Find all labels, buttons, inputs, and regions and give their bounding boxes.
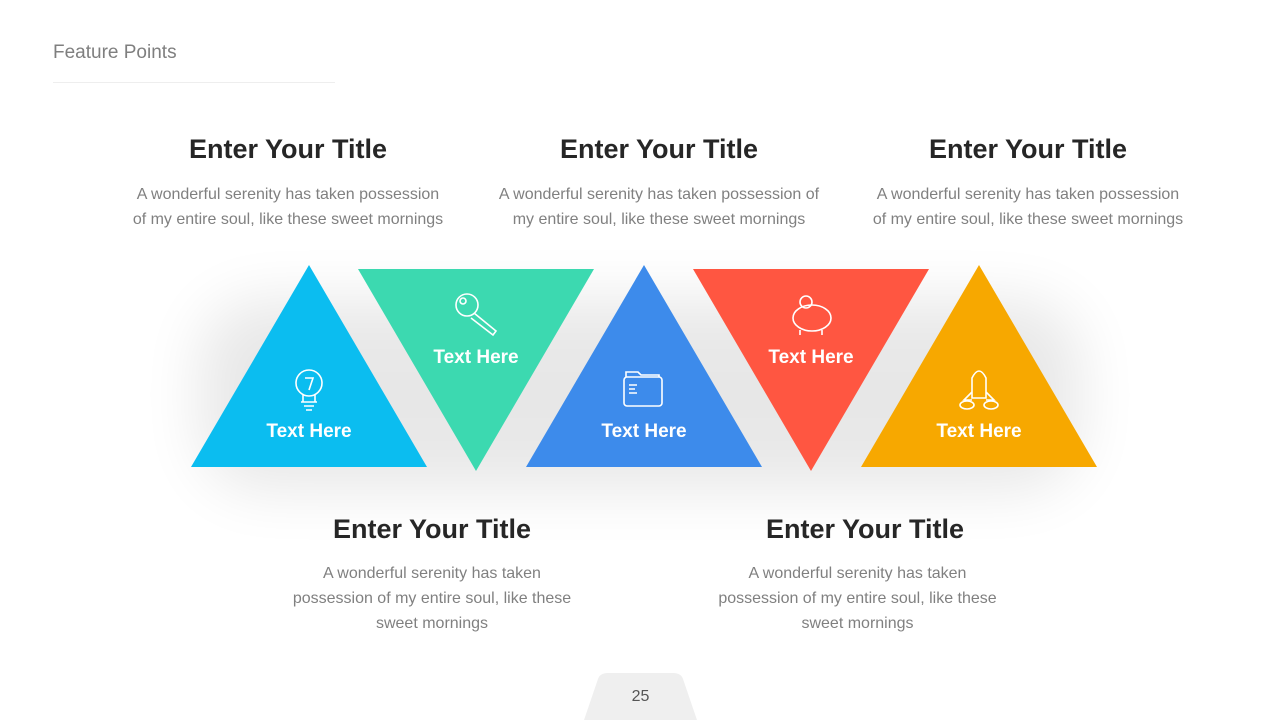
text block: bottom right: sweet mornings xyxy=(801,615,914,632)
triangle 1: light blue xyxy=(191,265,427,467)
triangle 2: green: Text Here xyxy=(433,347,519,368)
icon: key xyxy=(456,294,496,335)
text block: top right: Enter Your Title xyxy=(929,134,1127,164)
text block: bottom right: Enter Your Title xyxy=(766,514,964,544)
text block: top right xyxy=(873,134,1183,228)
text block: top right: of my entire soul, like these sweet mornings xyxy=(873,211,1183,228)
icon: rocket xyxy=(960,371,998,409)
text block: top middle xyxy=(499,134,820,228)
triangle 5: orange: Text Here xyxy=(936,421,1022,442)
text block: top right: A wonderful serenity has taken possession xyxy=(877,186,1179,203)
text block: bottom right xyxy=(718,514,997,632)
text block: bottom left: Enter Your Title xyxy=(333,514,531,544)
text block: top left xyxy=(133,134,443,228)
text block: top left: of my entire soul, like these sweet mornings xyxy=(133,211,443,228)
text block: bottom left: sweet mornings xyxy=(376,615,488,632)
triangle 2: green xyxy=(358,269,594,471)
icon: bulb xyxy=(296,370,322,410)
triangle 1: light blue: Text Here xyxy=(266,421,352,442)
page number tab xyxy=(584,673,697,720)
triangle 3: blue: Text Here xyxy=(601,421,687,442)
page number tab: 25 xyxy=(632,688,649,705)
text block: bottom left: A wonderful serenity has taken xyxy=(323,565,541,582)
text block: bottom right: A wonderful serenity has taken xyxy=(749,565,966,582)
text block: top left: A wonderful serenity has taken possession xyxy=(137,186,439,203)
triangle 4: red xyxy=(693,269,929,471)
text block: bottom left xyxy=(293,514,571,632)
text block: bottom left: possession of my entire soul, like these xyxy=(293,590,571,607)
icon: piggy bank xyxy=(793,296,831,335)
header: Feature Points: Feature Points xyxy=(53,42,177,63)
text block: top middle: Enter Your Title xyxy=(560,134,758,164)
text block: bottom right: possession of my entire soul, like these xyxy=(718,590,997,607)
triangle 3: blue xyxy=(526,265,762,467)
icon: folder xyxy=(624,372,662,406)
text block: top middle: my entire soul, like these sweet mornings xyxy=(513,211,805,228)
text block: top middle: A wonderful serenity has taken possession of xyxy=(499,186,819,203)
triangle 4: red: Text Here xyxy=(768,347,854,368)
text block: top left: Enter Your Title xyxy=(189,134,387,164)
triangle 5: orange xyxy=(861,265,1097,467)
